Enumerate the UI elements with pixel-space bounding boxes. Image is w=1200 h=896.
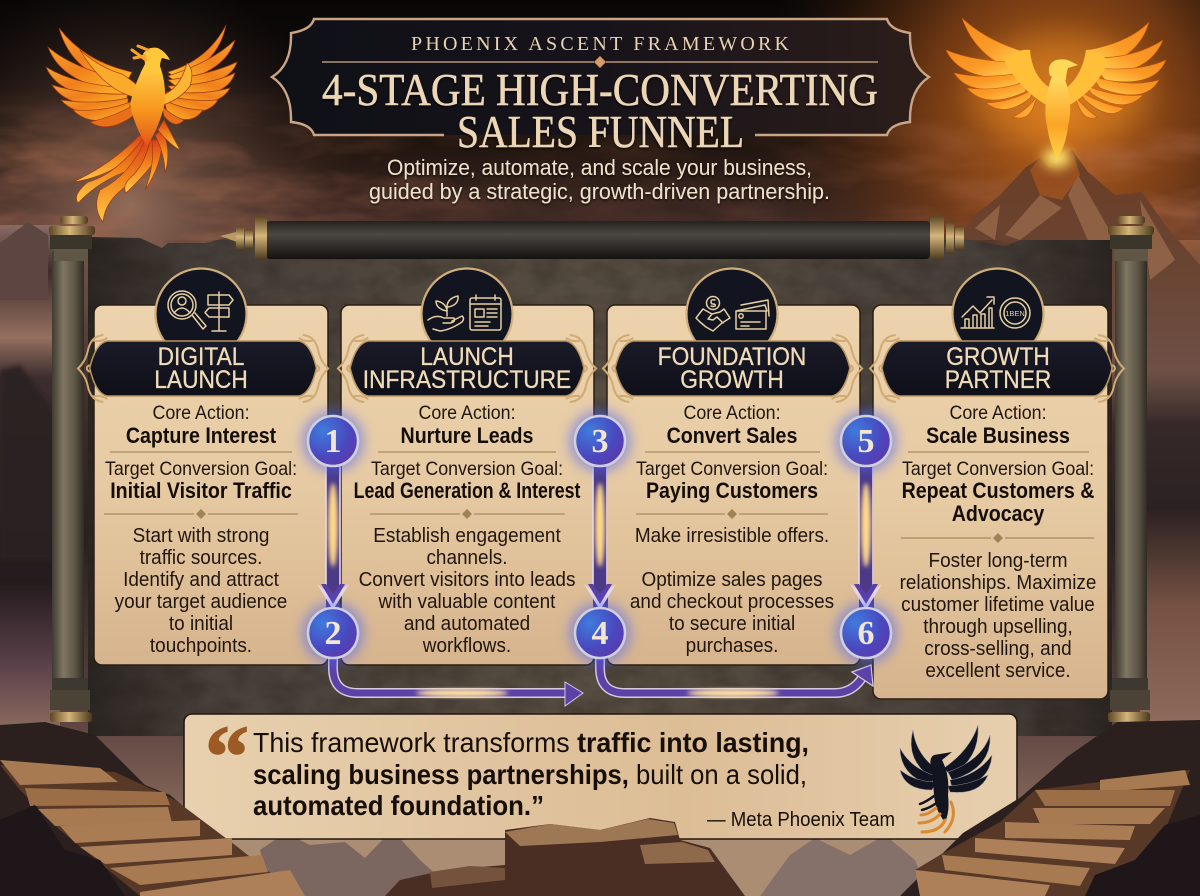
step badges: 4 xyxy=(592,615,608,652)
left pillar xyxy=(49,216,95,722)
stage 3 content xyxy=(630,401,834,657)
step badges: 6 xyxy=(858,615,874,652)
stage 2 banner: INFRASTRUCTURE xyxy=(363,366,571,394)
quote box: This framework transforms traffic into lasting, xyxy=(253,727,809,758)
stage 1 content: traffic sources. xyxy=(140,546,262,569)
stage 2 content: with valuable content xyxy=(378,590,556,613)
top scroll roller xyxy=(220,216,964,260)
card backgrounds xyxy=(94,305,1108,699)
subtitle: guided by a strategic, growth-driven partnership. xyxy=(369,179,830,204)
stage 4 content: excellent service. xyxy=(925,659,1071,682)
stage 2 content: Convert visitors into leads xyxy=(359,568,576,591)
stage 2 content: Target Conversion Goal: xyxy=(371,457,563,479)
stage 2 icon medallion xyxy=(422,268,512,360)
stage 3 banner: GROWTH xyxy=(680,366,784,394)
quote box: “ xyxy=(205,709,249,806)
quote box: — Meta Phoenix Team xyxy=(707,809,895,831)
distant mountains xyxy=(180,830,1020,896)
stage 3 content: Convert Sales xyxy=(667,424,797,448)
stage 3 content: purchases. xyxy=(686,634,778,657)
volcano mountain xyxy=(950,150,1200,425)
stage 1 banner xyxy=(78,335,328,402)
stage 1 banner: DIGITAL xyxy=(158,343,244,371)
stage 1 content: Start with strong xyxy=(133,524,269,547)
step badges: 1 xyxy=(324,423,342,460)
stage 4 icon medallion: 1BEN xyxy=(1005,309,1025,318)
stage 3 content: Target Conversion Goal: xyxy=(636,457,828,479)
step badges xyxy=(302,410,897,664)
subtitle: Optimize, automate, and scale your business, xyxy=(387,155,812,180)
main title: SALES FUNNEL xyxy=(457,106,744,157)
stage 2 content: channels. xyxy=(426,546,508,569)
quote box: automated foundation.” xyxy=(253,790,544,821)
central rocks xyxy=(385,818,745,896)
stage 1 content xyxy=(104,401,298,657)
quote box xyxy=(184,709,1017,839)
stage 4 content: Repeat Customers & xyxy=(902,479,1094,503)
stage 4 content: through upselling, xyxy=(923,615,1073,638)
title plaque xyxy=(272,19,929,135)
stage 4 banner xyxy=(870,335,1124,402)
stage 1 content: Core Action: xyxy=(152,401,250,423)
stage 1 content: Capture Interest xyxy=(126,424,276,448)
stage 4 icon medallion xyxy=(952,268,1044,360)
stage 3 icon medallion xyxy=(686,268,778,360)
scroll panel xyxy=(88,237,1112,736)
step badges: 3 xyxy=(592,423,608,460)
left phoenix xyxy=(46,25,237,222)
stage 2 banner xyxy=(338,335,596,402)
stage 1 icon medallion xyxy=(156,268,246,360)
arrow 4 to 6 xyxy=(600,655,873,697)
stage 4 content: Scale Business xyxy=(926,424,1070,448)
stage 4 content: Foster long-term xyxy=(929,549,1067,572)
main title xyxy=(322,64,878,157)
right pillar xyxy=(1108,216,1154,722)
right stone stairs xyxy=(900,720,1200,896)
subtitle xyxy=(369,155,830,204)
stage 2 content: Core Action: xyxy=(418,401,516,423)
arrow 2 to next column xyxy=(333,655,583,706)
stage 2 content: and automated xyxy=(404,612,530,635)
stage 1 content: to initial xyxy=(169,612,233,635)
stage 4 content: Target Conversion Goal: xyxy=(902,457,1094,479)
stage 3 content: Core Action: xyxy=(683,401,781,423)
stage 2 content: Nurture Leads xyxy=(401,424,533,448)
stage 2 content: Lead Generation & Interest xyxy=(354,479,580,503)
stage 3 banner xyxy=(603,335,862,402)
stage 4 content xyxy=(900,401,1096,682)
stage 2 content: workflows. xyxy=(422,634,511,657)
stage 2 content xyxy=(354,401,580,657)
stage 4 content: cross-selling, and xyxy=(924,637,1072,660)
stage 3 content: to secure initial xyxy=(669,612,795,635)
step badges: 2 xyxy=(324,615,342,652)
stage 3 content: Optimize sales pages xyxy=(641,568,823,591)
stage 2 banner: LAUNCH xyxy=(420,343,514,371)
stage 1 content: Target Conversion Goal: xyxy=(105,457,297,479)
arrow 5 to 6 xyxy=(850,460,882,615)
stage 4 content: customer lifetime value xyxy=(901,593,1095,616)
stage 3 content: and checkout processes xyxy=(630,590,834,613)
stage 3 content: Paying Customers xyxy=(646,479,818,503)
stage 1 content: Identify and attract xyxy=(123,568,279,591)
step badges: 5 xyxy=(858,423,874,460)
quote box: scaling business partnerships, built on a solid, xyxy=(253,759,807,790)
stage 3 content: Make irresistible offers. xyxy=(635,524,829,547)
arrow 3 to 4 xyxy=(584,460,616,615)
stage 3 banner: FOUNDATION xyxy=(658,343,806,371)
left stone stairs xyxy=(0,722,305,896)
stage 1 content: touchpoints. xyxy=(150,634,252,657)
stage 4 banner: PARTNER xyxy=(945,366,1051,394)
arrow 1 to 2 xyxy=(317,460,349,615)
framework eyebrow: PHOENIX ASCENT FRAMEWORK xyxy=(411,33,790,55)
stage 1 content: your target audience xyxy=(115,590,287,613)
dark phoenix logo xyxy=(900,725,992,832)
stage 1 content: Initial Visitor Traffic xyxy=(110,479,292,503)
stage 1 banner: LAUNCH xyxy=(154,366,248,394)
stage 4 content: relationships. Maximize xyxy=(900,571,1096,594)
right phoenix with glow xyxy=(946,18,1166,168)
stage 4 content: Core Action: xyxy=(949,401,1047,423)
stage 2 content: Establish engagement xyxy=(373,524,561,547)
stage 4 banner: GROWTH xyxy=(946,343,1050,371)
main title: 4-STAGE HIGH-CONVERTING xyxy=(322,64,878,115)
stage 4 content: Advocacy xyxy=(952,502,1045,526)
